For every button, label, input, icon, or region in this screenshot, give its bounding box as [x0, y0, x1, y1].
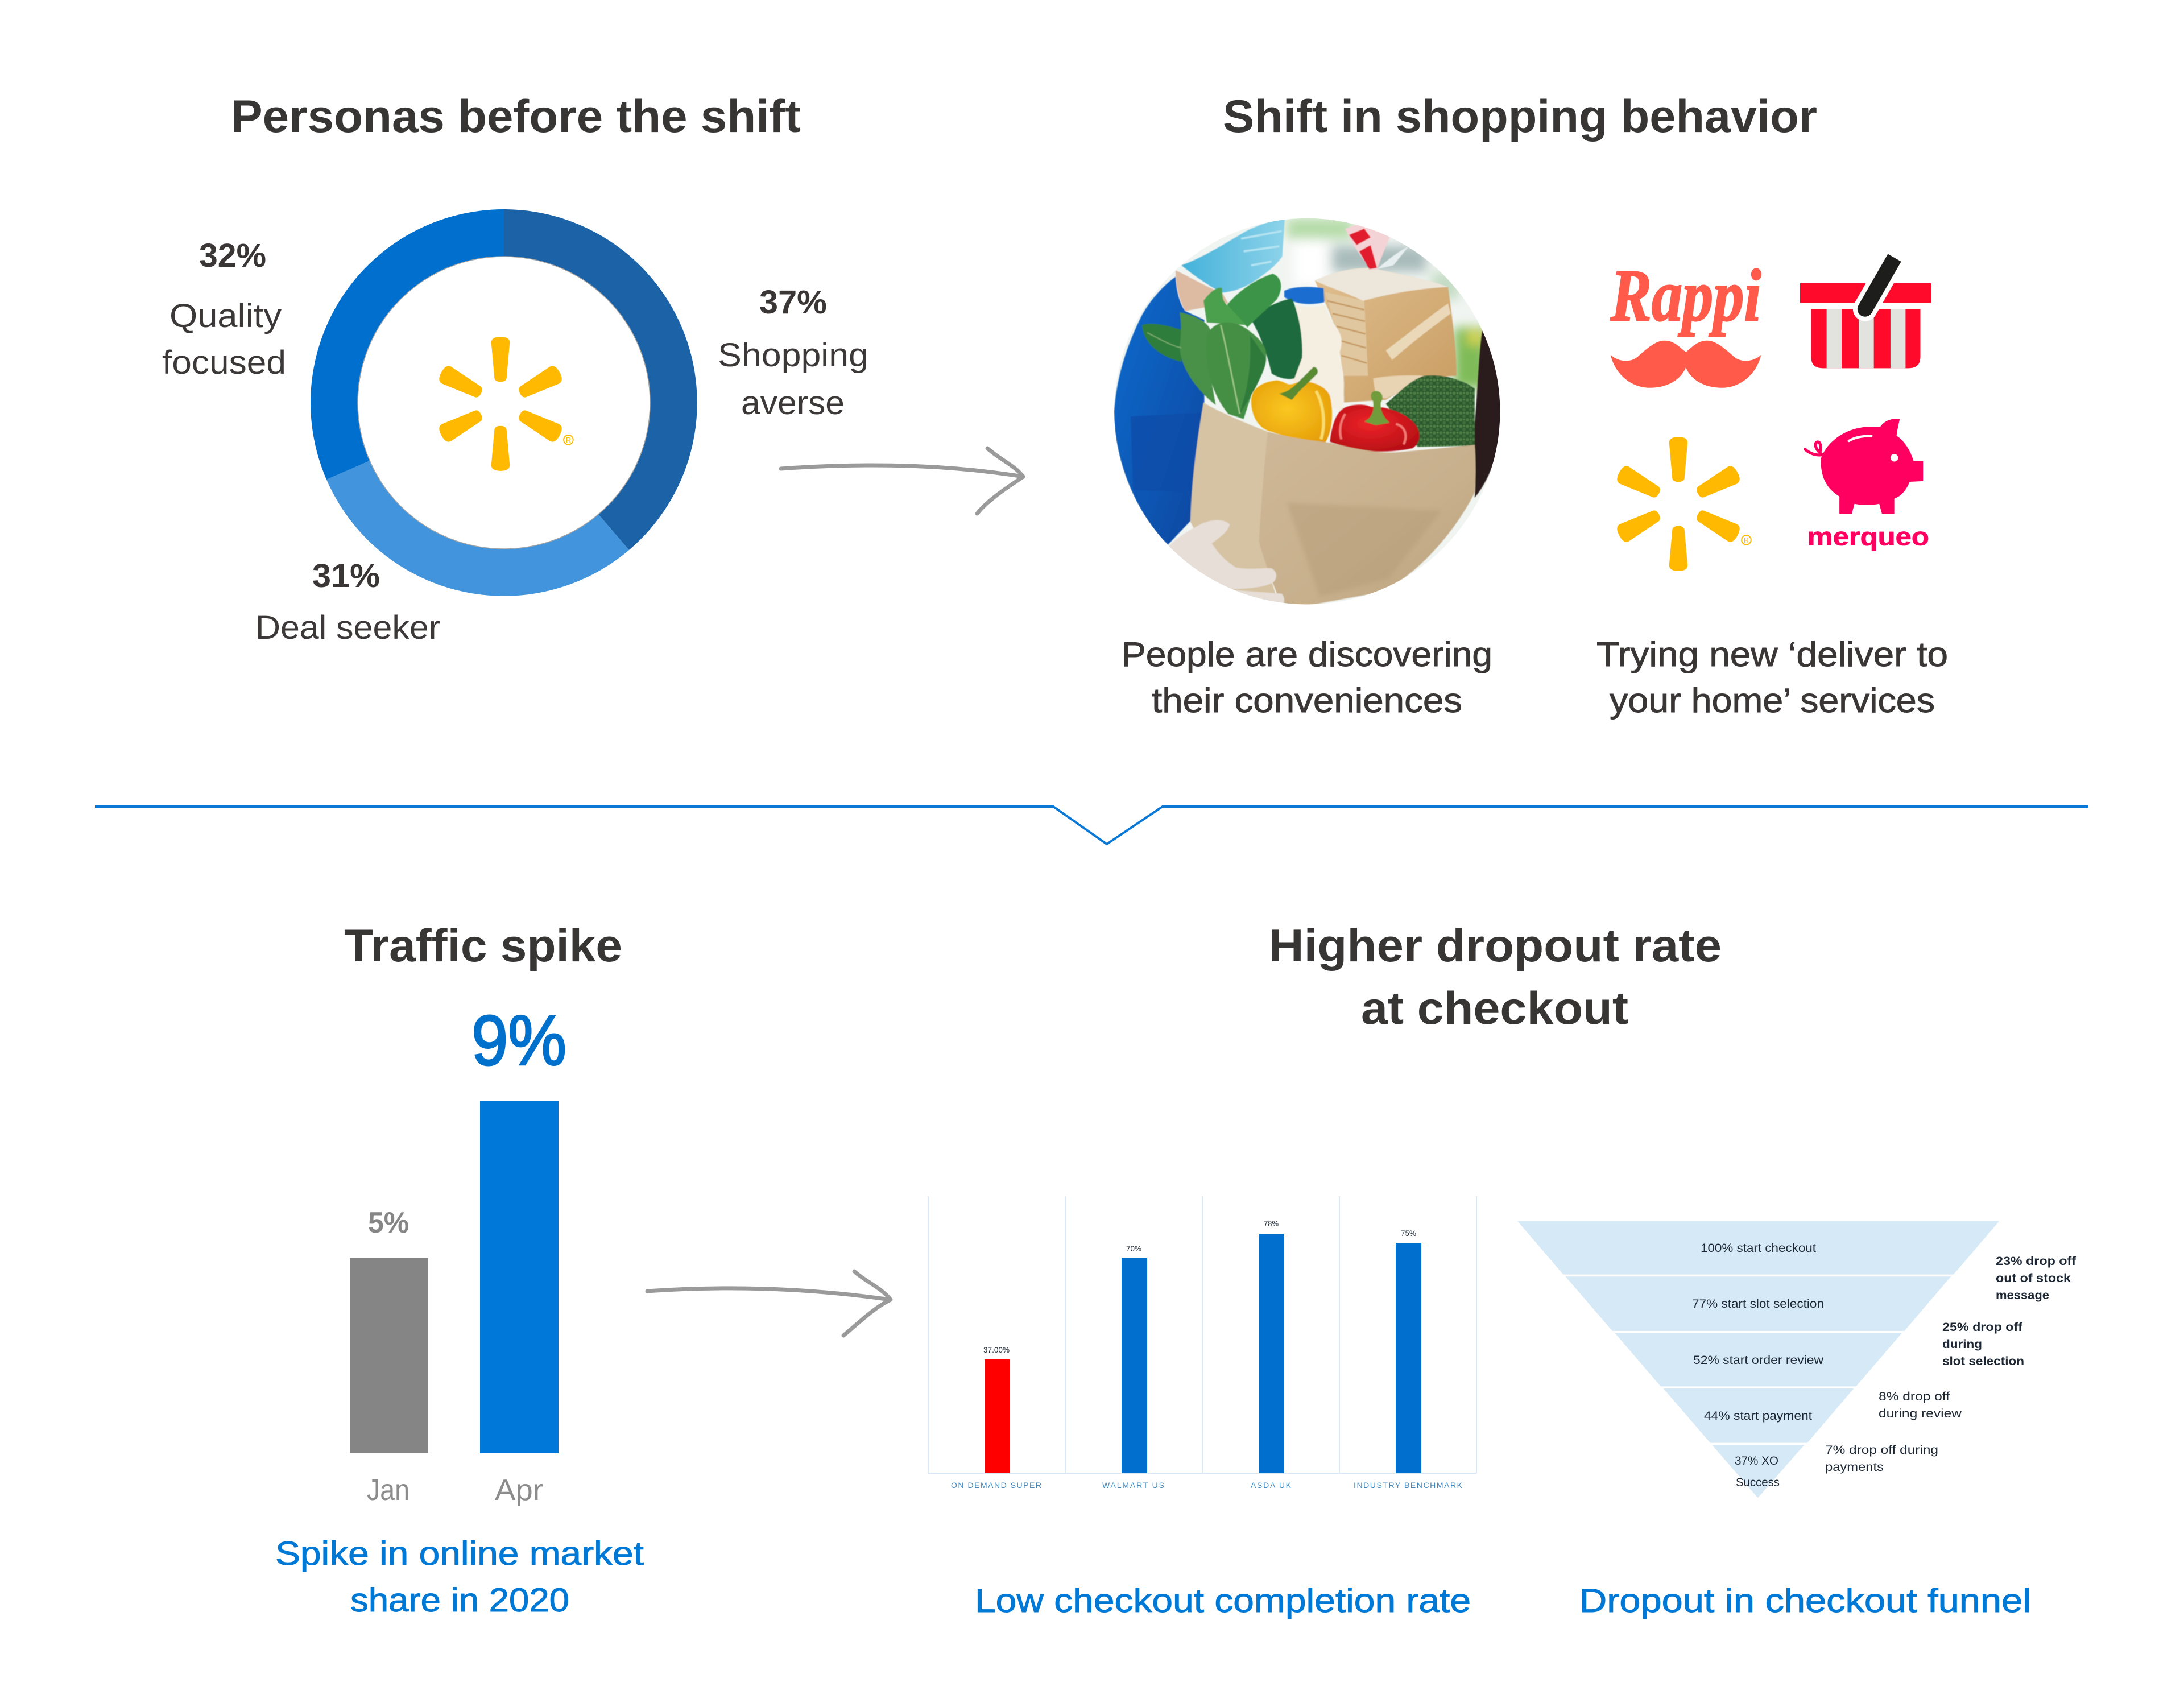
- section divider with chevron: [95, 807, 2088, 844]
- dropoff note: 23%: 23% drop off: [1996, 1255, 2077, 1268]
- axis label: apr: Apr: [495, 1474, 543, 1507]
- merqueo wordmark: merqueo: [1807, 523, 1929, 551]
- skin: [1176, 270, 1228, 311]
- funnel stage labels: [1692, 1242, 1824, 1489]
- bottle: [1292, 305, 1344, 414]
- dropoff note: 25%: [1942, 1321, 2024, 1368]
- logo: walmart spark: [1615, 437, 1751, 571]
- segment: shopping averse 37%: [504, 209, 697, 550]
- dropoff note: 8%: [1879, 1390, 1962, 1420]
- funnel stage labels: 52% start order review: [1693, 1354, 1824, 1367]
- category labels: ON DEMAND SUPER: [951, 1481, 1041, 1490]
- funnel stage labels: 44% start payment: [1704, 1409, 1812, 1423]
- label: 37% shopping averse: averse: [741, 385, 845, 421]
- rappi wordmark: Rappi: [1610, 255, 1761, 337]
- caption: spike in online market share: Spike in online market: [275, 1535, 644, 1572]
- logo: rappi: [1610, 255, 1761, 388]
- dropoff note: 8%: during review: [1879, 1407, 1962, 1420]
- glove: [1169, 520, 1284, 609]
- bag: [1190, 403, 1279, 606]
- caption: spike in online market share: [275, 1535, 644, 1619]
- label: 31% deal seeker: 31%: [312, 557, 380, 594]
- dropoff note: 7%: 7% drop off during: [1825, 1444, 1938, 1457]
- bar: walmart us: [1122, 1258, 1147, 1473]
- label: 31% deal seeker: Deal seeker: [255, 609, 440, 646]
- heading: traffic spike: Traffic spike: [344, 920, 622, 972]
- arrow: personas to shift: [781, 448, 1023, 514]
- caption: people discovering conveniences: [1122, 635, 1492, 720]
- dropoff note: 23%: message: [1996, 1289, 2049, 1302]
- bread: [1315, 268, 1457, 403]
- bar: on demand super: [985, 1359, 1010, 1473]
- caption: low checkout completion rate: Low checkout completion rate: [975, 1582, 1471, 1619]
- right arm: [1474, 330, 1500, 498]
- red pepper: [1330, 405, 1420, 452]
- rappi moustache: [1611, 341, 1761, 388]
- segment: deal seeker 31%: [326, 461, 629, 596]
- bar values: 37.00%: [983, 1345, 1010, 1354]
- label: 32% quality focused: [162, 237, 286, 381]
- caption: trying new services: [1596, 635, 1948, 720]
- shirt: [1114, 277, 1204, 545]
- dropoff note: 25%: 25% drop off: [1942, 1321, 2023, 1334]
- donut chart: personas: [311, 209, 697, 596]
- heading: higher dropout rate at checkout: at checkout: [1361, 983, 1628, 1034]
- logo: merqueo piggy: [1805, 419, 1929, 551]
- leaves: [1251, 299, 1302, 379]
- value: 9%: 9%: [471, 1002, 566, 1080]
- heading: higher dropout rate at checkout: [1269, 920, 1722, 1034]
- label: 32% quality focused: 32%: [199, 237, 266, 274]
- funnel: checkout dropout: [1517, 1221, 2077, 1498]
- icon: walmart spark in donut: [437, 337, 573, 471]
- bar values: 75%: [1401, 1229, 1416, 1238]
- mask: [1181, 218, 1285, 292]
- bar values: [983, 1219, 1416, 1354]
- dropoff note: 23%: [1996, 1255, 2077, 1302]
- caption: trying new services: your home’ services: [1610, 681, 1935, 720]
- bar values: 70%: [1126, 1244, 1141, 1253]
- label: 37% shopping averse: [718, 284, 868, 421]
- segment: quality focused 32%: [311, 209, 504, 480]
- label: 37% shopping averse: 37%: [759, 284, 827, 321]
- funnel stage labels: 77% start slot selection: [1692, 1297, 1824, 1311]
- bar: april: [480, 1101, 559, 1453]
- heading: higher dropout rate at checkout: Higher dropout rate: [1269, 920, 1722, 972]
- photo: grocery bag held by delivery person: [1109, 213, 1505, 609]
- bag tie: [1345, 225, 1391, 270]
- dropoff note: 23%: out of stock: [1996, 1272, 2071, 1285]
- value: 5%: 5%: [368, 1206, 409, 1239]
- label: 32% quality focused: focused: [162, 344, 286, 381]
- dropoff note: 25%: during: [1942, 1338, 1982, 1351]
- label: 37% shopping averse: Shopping: [718, 337, 868, 374]
- heading: personas before the shift: Personas before the shift: [231, 91, 801, 142]
- caption: dropout in checkout funnel: Dropout in checkout funnel: [1579, 1582, 2031, 1619]
- caption: spike in online market share: share in 2020: [350, 1582, 569, 1619]
- bar chart: checkout completion rate: [928, 1196, 1476, 1490]
- category labels: INDUSTRY BENCHMARK: [1354, 1481, 1463, 1490]
- arrow: traffic to dropout: [647, 1271, 891, 1336]
- category labels: ASDA UK: [1251, 1481, 1292, 1490]
- bar: industry benchmark: [1396, 1243, 1421, 1473]
- bar: asda uk: [1259, 1234, 1284, 1473]
- dropoff note: 25%: slot selection: [1942, 1355, 2024, 1368]
- category labels: WALMART US: [1102, 1481, 1164, 1490]
- yellow pepper: [1251, 381, 1332, 443]
- caption: people discovering conveniences: People are discovering: [1122, 635, 1492, 673]
- logo: red basket: [1800, 257, 1931, 368]
- dropoff note: 8%: 8% drop off: [1879, 1390, 1950, 1403]
- axis label: jan: Jan: [367, 1474, 410, 1507]
- heading: shift in shopping behavior: Shift in shopping behavior: [1223, 91, 1817, 142]
- broccoli: [1386, 375, 1475, 447]
- caption: trying new services: Trying new ‘deliver to: [1596, 635, 1948, 673]
- donut inner ring: [358, 257, 650, 549]
- caption: people discovering conveniences: their conveniences: [1152, 681, 1462, 720]
- funnel stage labels: Success: [1736, 1476, 1780, 1489]
- label: 31% deal seeker: [255, 557, 440, 646]
- dropoff note: 7%: payments: [1825, 1461, 1884, 1474]
- funnel stage labels: 100% start checkout: [1701, 1242, 1816, 1255]
- label: 32% quality focused: Quality: [169, 297, 282, 334]
- bar: january: [350, 1258, 428, 1453]
- bar chart: traffic spike: [350, 1002, 566, 1507]
- dropoff note: 7%: [1825, 1444, 1938, 1474]
- category labels: [951, 1481, 1463, 1490]
- funnel stage labels: 37% XO: [1735, 1454, 1778, 1468]
- funnel shapes: [1517, 1221, 1999, 1498]
- bar values: 78%: [1264, 1219, 1279, 1228]
